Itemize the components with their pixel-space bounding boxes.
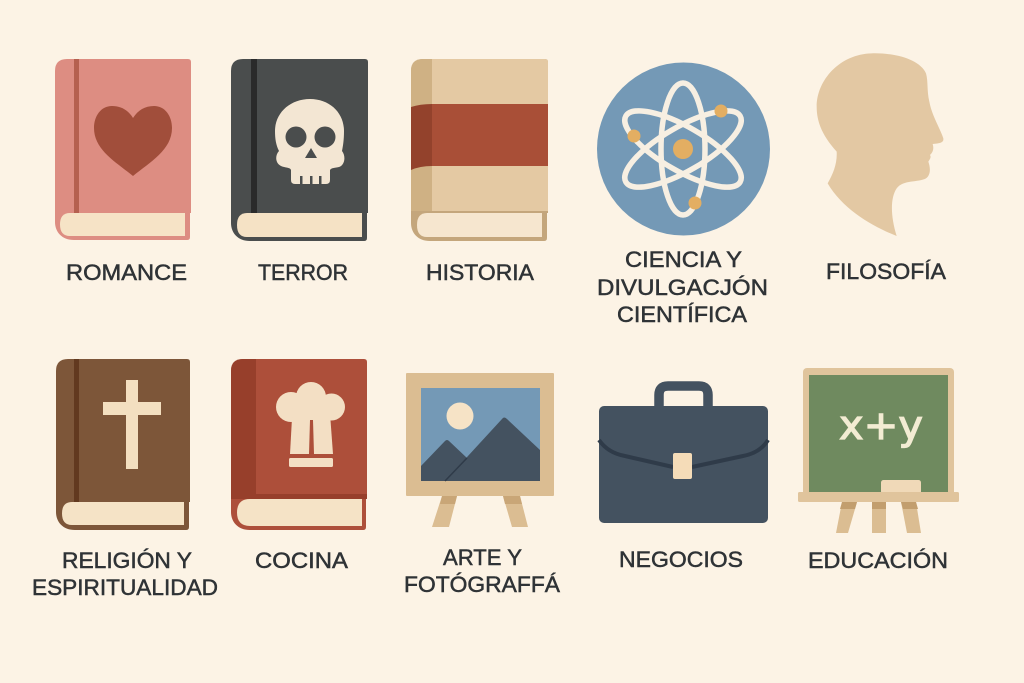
panel: historia [411, 59, 548, 285]
panel: negocios [599, 386, 768, 572]
panel: arte [404, 373, 560, 597]
panel: terror [231, 59, 368, 285]
icon: brown book with cross [56, 359, 190, 530]
icon: briefcase [599, 386, 768, 523]
label: ciencia y divulgación científica: DIVULGACJÓN [597, 275, 768, 300]
icon: dark book with skull [231, 59, 368, 241]
label: filosofia: FILOSOFÍA [826, 259, 946, 284]
label: educación: EDUCACIÓN [808, 548, 948, 573]
icon: pink book [55, 59, 191, 240]
chalk formula: x+y [839, 403, 923, 449]
panel: romance [55, 59, 191, 285]
icon: framed picture on easel [406, 373, 554, 527]
panel: educacion [798, 368, 959, 573]
icon: head silhouette [817, 53, 943, 236]
label: arte y fotografía: ARTE Y [443, 545, 522, 570]
label: cocina: COCINA [255, 548, 348, 573]
panel: filosofia [817, 53, 946, 284]
icon: red book with chef hat [231, 359, 367, 530]
label: ciencia y divulgación científica [597, 247, 768, 327]
panel: ciencia [597, 62, 770, 327]
label: ciencia y divulgación científica: CIENTÍFICA [617, 302, 747, 327]
panel: religion [32, 359, 218, 600]
label: terror: TERROR [258, 260, 348, 285]
icon: atom [597, 62, 770, 236]
label: arte y fotografía [404, 545, 560, 597]
label: religión y espiritualidad [32, 548, 218, 600]
panel: cocina [231, 359, 367, 573]
label: negocios: NEGOCIOS [619, 547, 743, 572]
label: religión y espiritualidad: RELIGIÓN Y [62, 548, 192, 573]
label: arte y fotografía: FOTÓGRAFFÁ [404, 572, 560, 597]
icon: blackboard [798, 368, 959, 533]
label: religión y espiritualidad: ESPIRITUALIDAD [32, 575, 218, 600]
label: historia: HISTORIA [426, 260, 534, 285]
label: ciencia y divulgación científica: CIENCIA Y [625, 247, 742, 272]
label: romance: ROMANCE [66, 260, 187, 285]
icon: tan book with red band [411, 59, 548, 241]
